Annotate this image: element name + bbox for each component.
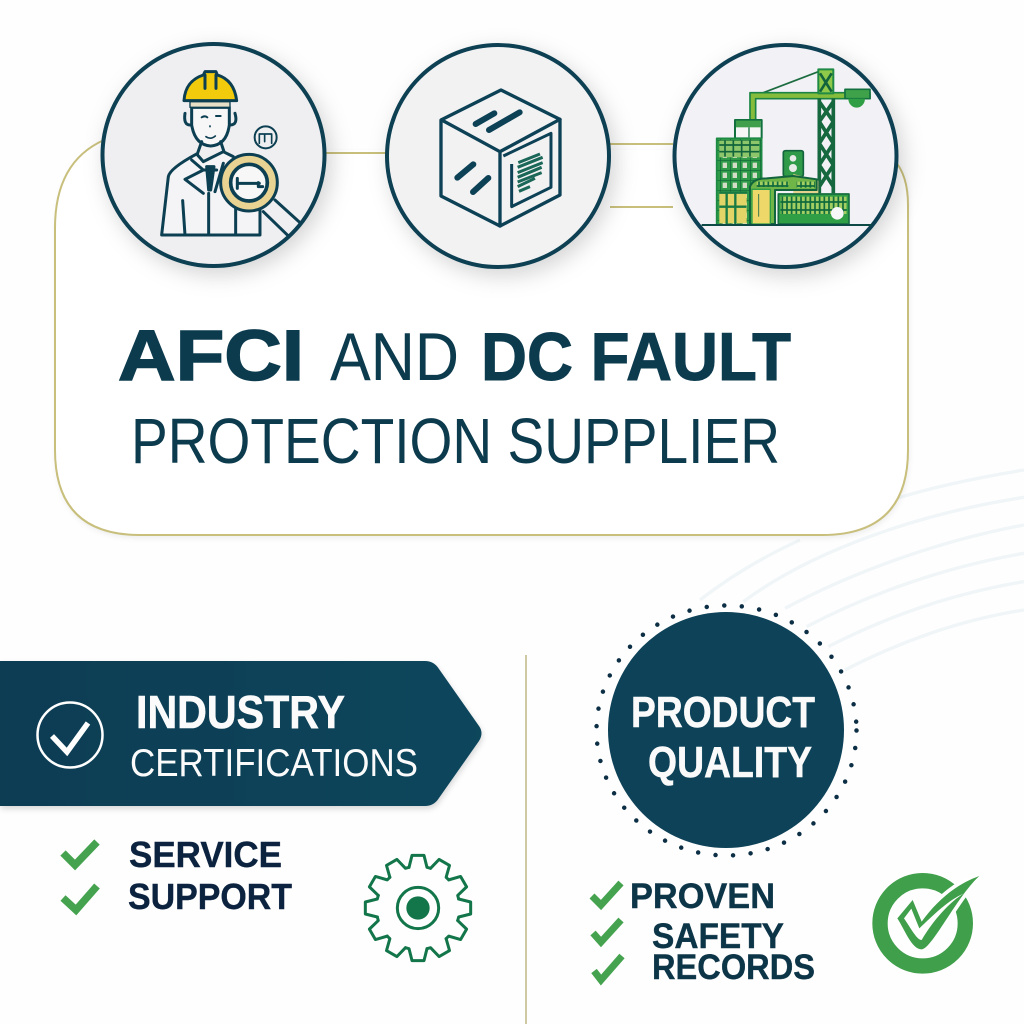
title line 1: DC FAULT (481, 319, 791, 395)
background wave lines (700, 470, 1024, 670)
title line 1: AND (330, 319, 459, 395)
title line 2: PROTECTION SUPPLIER (131, 405, 780, 477)
proven safety records list (592, 877, 815, 987)
banner subheading: CERTIFICATIONS (130, 742, 418, 785)
icon circle: product box (387, 45, 609, 267)
worker illustration (162, 72, 300, 235)
icon circle: engineer inspector (102, 44, 324, 266)
icon: green check badge (880, 876, 979, 966)
product quality badge (596, 606, 856, 856)
service support list: SUPPORT (128, 876, 292, 917)
icon circle: industrial buildings and crane (674, 45, 896, 267)
badge text: PRODUCT (631, 688, 815, 737)
banner: industry certifications (0, 661, 482, 806)
product quality badge: QUALITY (648, 738, 812, 787)
title line 1: AFCI (118, 317, 304, 396)
service support list (63, 834, 292, 917)
city illustration (702, 69, 872, 225)
title line 1 (118, 317, 791, 396)
divider (525, 655, 527, 1024)
proven safety records list: RECORDS (652, 948, 815, 987)
proven safety records list: PROVEN (630, 877, 775, 916)
box illustration (441, 90, 560, 226)
panel outline (55, 140, 908, 535)
proven safety records list: SAFETY (652, 917, 784, 956)
main title panel (55, 140, 908, 535)
icon: check in circle (38, 702, 102, 768)
icon: gear (365, 855, 471, 961)
service support list: SERVICE (129, 834, 282, 875)
banner heading: INDUSTRY (136, 686, 345, 738)
